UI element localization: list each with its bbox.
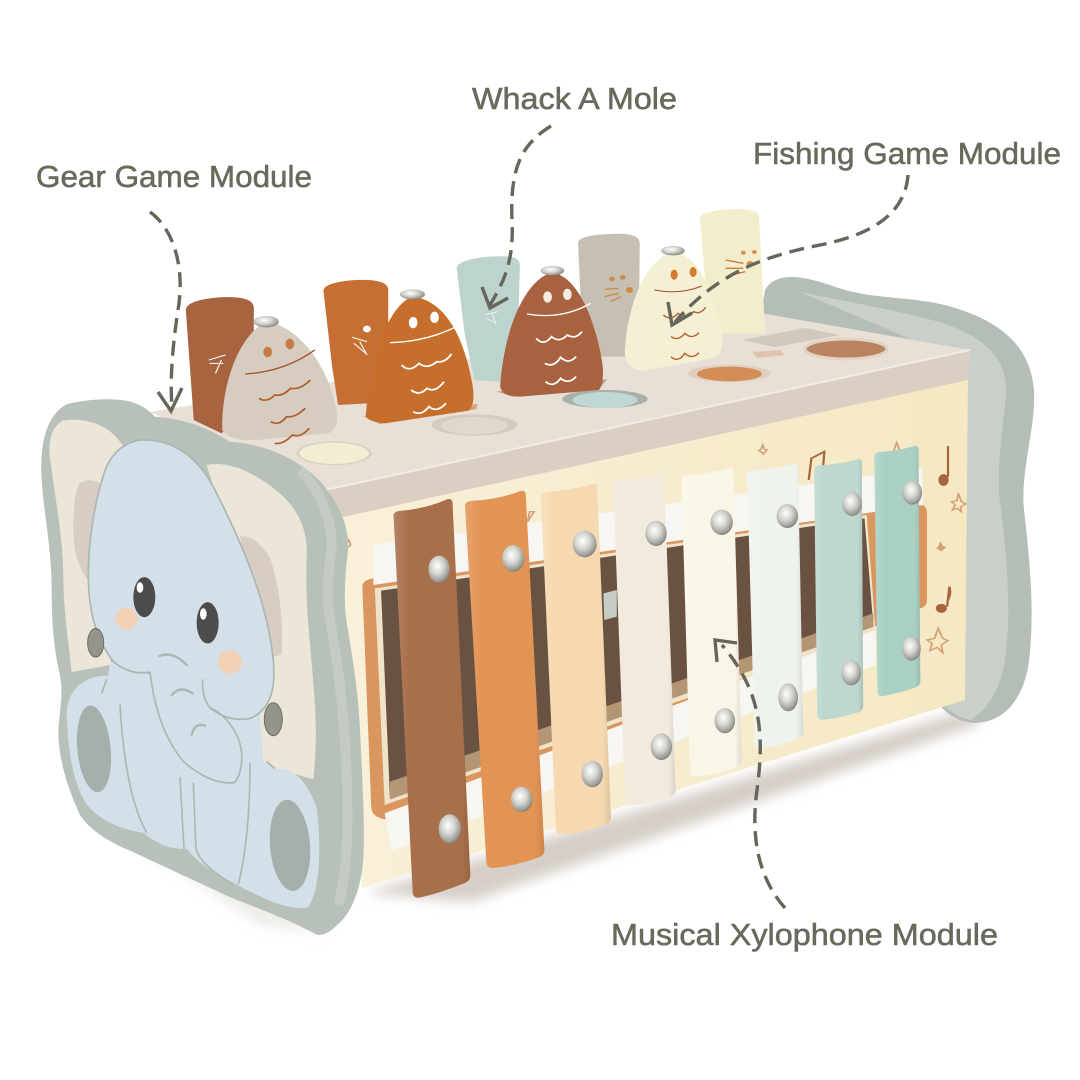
arrow: xylophone	[715, 640, 785, 908]
panel: elephant side	[41, 399, 364, 935]
trunk line	[203, 679, 210, 708]
elephant head	[88, 440, 274, 783]
back peg: yellow	[700, 209, 765, 333]
foot pads	[73, 704, 314, 893]
eyes	[133, 577, 219, 644]
back side panel	[760, 277, 1034, 723]
elephant body	[67, 661, 319, 908]
label: musical xylophone module: Musical Xylophone Module	[611, 917, 998, 952]
xylophone front face	[338, 380, 968, 888]
ground shadow	[120, 712, 985, 935]
key 8 teal	[874, 446, 920, 696]
star decorations	[345, 443, 966, 653]
arrow: fishing game	[668, 175, 908, 325]
trunk wrinkles	[159, 655, 205, 735]
dark window	[375, 515, 876, 805]
deck details: far hole and label plate	[742, 328, 887, 359]
key 1 brown	[394, 499, 470, 898]
bottom rail	[385, 630, 876, 851]
fish peg: orange	[363, 289, 478, 424]
panel: xylophone module	[345, 443, 966, 898]
fish peg: cream	[625, 246, 722, 371]
key 2 orange	[465, 491, 544, 868]
panel: game pegs	[186, 209, 771, 465]
key 5 ivory	[681, 468, 742, 777]
screws	[88, 629, 282, 736]
elephant limb lines	[102, 679, 275, 885]
back peg: orange	[323, 280, 388, 405]
deck front lip	[325, 350, 970, 520]
label: gear game module: Gear Game Module	[36, 159, 312, 194]
side panel bevel highlight	[300, 470, 347, 904]
side panel body	[41, 399, 364, 935]
key 7 pale teal	[814, 459, 863, 720]
key 3 peach	[541, 484, 611, 835]
fish peg: beige	[222, 316, 337, 444]
left ear	[49, 420, 130, 672]
fish peg: brown	[496, 266, 607, 397]
key 6 white	[747, 464, 803, 749]
right ear	[207, 464, 316, 779]
arrow: whack a mole	[482, 126, 551, 308]
cheeks	[115, 607, 242, 674]
arrow: gear game	[150, 212, 182, 411]
orange window frame	[362, 505, 927, 820]
rivets	[428, 481, 922, 844]
whack-a-mole deck top	[150, 312, 970, 490]
back peg: gray	[578, 234, 640, 357]
label: fishing game module: Fishing Game Module	[753, 136, 1061, 171]
back peg: brown	[186, 297, 254, 433]
inner left ear	[73, 480, 105, 583]
key 4 cream	[613, 473, 676, 805]
top rail	[373, 468, 923, 585]
label: whack a mole: Whack A Mole	[472, 81, 677, 116]
hole rings and buttons	[297, 365, 771, 465]
note decorations	[809, 446, 950, 612]
inner right ear	[240, 536, 282, 658]
back peg: teal	[457, 256, 520, 382]
